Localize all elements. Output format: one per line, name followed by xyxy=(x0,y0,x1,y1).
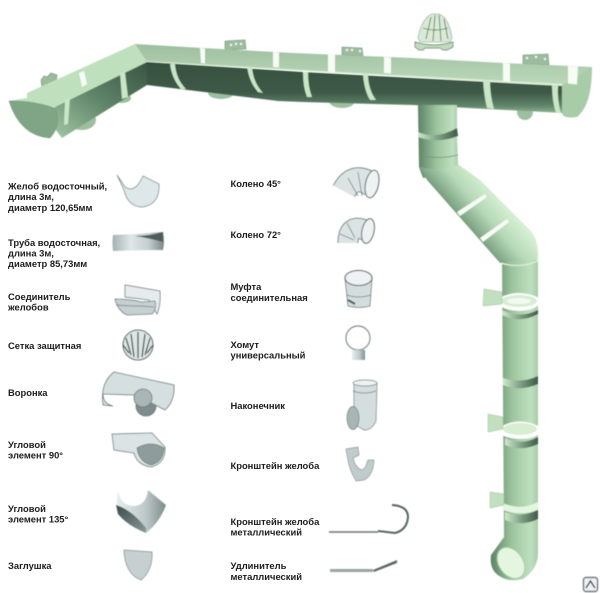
label: coupling: Муфта xyxy=(230,281,261,292)
label: connector: Соединитель xyxy=(8,291,70,302)
label: clamp: Хомут xyxy=(230,339,259,350)
label: gutter bracket: Кронштейн желоба xyxy=(230,460,320,471)
label: corner 90: элемент 90° xyxy=(8,450,63,460)
label: metal extender: металлический xyxy=(230,571,302,582)
label: coupling: соединительная xyxy=(230,292,308,303)
diagonal pipe gaps xyxy=(457,194,509,242)
gutter lip highlight xyxy=(147,61,563,86)
icon: plastic gutter bracket xyxy=(346,447,374,481)
leaf guard on top of gutter xyxy=(415,14,453,50)
icon: metal gutter bracket xyxy=(329,505,408,533)
icon: metal extender xyxy=(330,560,397,572)
gutter gaps xyxy=(79,48,578,87)
label: metal gutter bracket: металлический xyxy=(230,526,302,538)
icon: elbow 72 xyxy=(340,218,376,244)
outlet opening xyxy=(491,542,531,584)
icon: 135 degree corner xyxy=(116,490,166,533)
downpipe top clamp xyxy=(418,128,458,140)
label: corner 135: Угловой xyxy=(8,503,46,514)
icon: elbow 45 xyxy=(344,169,381,199)
icon: watermark badge xyxy=(584,578,598,592)
labels: left column xyxy=(7,180,107,571)
vertical downpipe xyxy=(491,260,538,580)
right gutter inner face xyxy=(135,44,592,85)
parts list icons xyxy=(102,169,598,591)
tab screw holes xyxy=(230,43,546,65)
gutter mounting tabs xyxy=(41,40,549,88)
pipe clamp tabs xyxy=(483,289,504,508)
icon: leaf guard xyxy=(123,330,153,360)
downpipe joint line xyxy=(419,155,458,158)
right end cap xyxy=(562,67,592,118)
gutter connector straps xyxy=(64,64,561,125)
icon: gutter connector xyxy=(115,285,160,315)
right gutter front xyxy=(147,62,563,113)
label: pipe: длина 3м, xyxy=(8,248,54,258)
lower pipe band 2 xyxy=(503,376,538,388)
label: elbow 45: Колено 45° xyxy=(230,178,281,189)
label: gutter: диаметр 120,65мм xyxy=(8,202,92,213)
label: pipe: Труба водосточная, xyxy=(8,237,100,248)
icon: 90 degree corner xyxy=(112,433,165,467)
icon: outlet xyxy=(347,380,377,430)
label: end cap: Заглушка xyxy=(8,560,52,571)
label: guard: Сетка защитная xyxy=(8,340,81,351)
icon: gutter xyxy=(117,175,159,207)
lower pipe band 4 xyxy=(503,502,539,523)
left gutter front xyxy=(52,62,147,138)
label: corner 135: элемент 135° xyxy=(8,514,69,524)
icon: drain pipe xyxy=(112,232,164,251)
labels: right column xyxy=(230,178,320,582)
icon: funnel xyxy=(102,372,174,416)
icon: end cap xyxy=(124,550,152,580)
lower pipe band 3 xyxy=(500,422,540,448)
label: gutter: длина 3м, xyxy=(8,191,54,202)
label: pipe: диаметр 85,73мм xyxy=(8,258,87,269)
label: clamp: универсальный xyxy=(230,350,306,360)
label: gutter: Желоб водосточный, xyxy=(8,180,107,192)
downpipe top section xyxy=(418,105,459,178)
collar line xyxy=(501,261,538,266)
gutter hanger bumps xyxy=(68,87,533,130)
lower pipe band 1 xyxy=(499,293,539,319)
label: connector: желобов xyxy=(7,302,49,312)
icon: pipe clamp xyxy=(346,326,370,360)
label: outlet: Наконечник xyxy=(230,400,285,411)
left gutter inner face xyxy=(9,44,147,107)
icon: coupling xyxy=(345,270,372,308)
label: funnel: Воронка xyxy=(8,387,48,398)
diagonal pipe xyxy=(420,165,538,265)
label: elbow 72: Колено 72° xyxy=(230,229,281,240)
label: metal gutter bracket: Кронштейн желоба xyxy=(230,516,319,527)
label: metal extender: Удлинитель xyxy=(230,560,286,571)
left end cap xyxy=(9,101,58,138)
label: corner 90: Угловой xyxy=(8,439,46,450)
